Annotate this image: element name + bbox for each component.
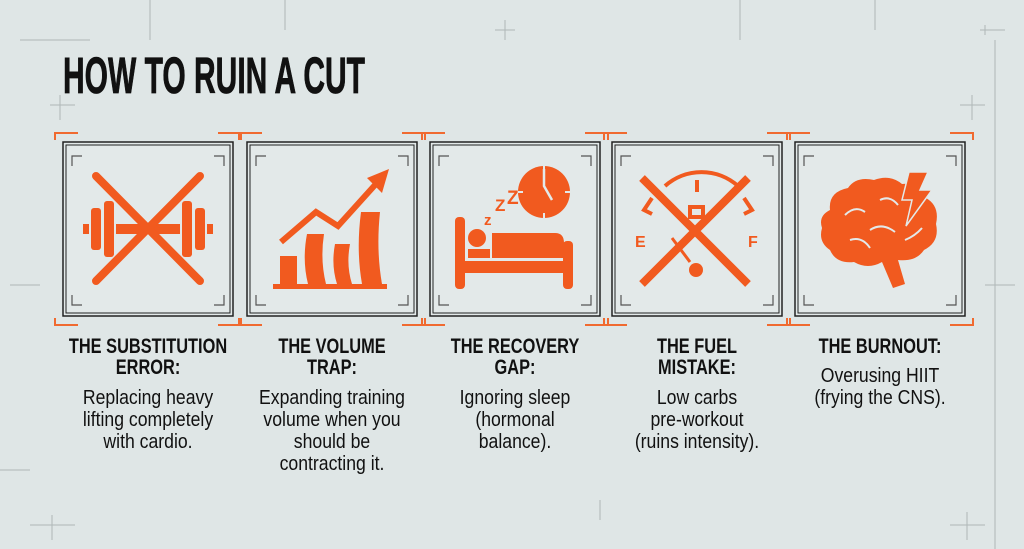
title: HOW TO RUIN A CUT bbox=[63, 47, 365, 104]
text: volume trap: THE VOLUME bbox=[278, 334, 386, 357]
text: volume trap: volume when you bbox=[263, 408, 401, 430]
icon: bed with clock bbox=[455, 166, 573, 289]
panel: substitution error bbox=[55, 133, 241, 325]
text: fuel mistake: MISTAKE: bbox=[658, 355, 736, 378]
panel: fuel mistake bbox=[604, 133, 790, 325]
panel: recovery gap bbox=[422, 133, 608, 325]
panel: volume trap bbox=[239, 133, 425, 325]
text: substitution error: ERROR: bbox=[116, 355, 180, 378]
text: volume trap: Expanding training bbox=[259, 386, 405, 408]
text: recovery gap: balance). bbox=[479, 430, 551, 452]
text: recovery gap: Ignoring sleep bbox=[460, 386, 570, 408]
icon: crossed fuel gauge bbox=[642, 172, 752, 284]
text: volume trap: should be bbox=[294, 430, 370, 452]
panel: burnout bbox=[787, 133, 973, 325]
icon: bed with clock: z bbox=[484, 212, 492, 229]
text: burnout bbox=[814, 334, 946, 408]
text: fuel mistake: pre-workout bbox=[650, 408, 744, 430]
text: volume trap: contracting it. bbox=[280, 452, 384, 474]
text: burnout: (frying the CNS). bbox=[814, 386, 946, 408]
text: fuel mistake: Low carbs bbox=[657, 386, 737, 408]
text: burnout: THE BURNOUT: bbox=[819, 334, 941, 357]
panel: fuel mistake: F bbox=[748, 234, 758, 251]
text: recovery gap: GAP: bbox=[495, 355, 535, 378]
text: fuel mistake: THE FUEL bbox=[657, 334, 737, 357]
icon: bed with clock: Z bbox=[495, 196, 505, 215]
panel: fuel mistake: E bbox=[635, 234, 646, 251]
text: recovery gap: THE RECOVERY bbox=[451, 334, 580, 357]
text: substitution error bbox=[69, 334, 227, 452]
icon: bed with clock: Z bbox=[507, 188, 519, 209]
text: substitution error: with cardio. bbox=[103, 430, 193, 452]
text: fuel mistake bbox=[635, 334, 759, 452]
text: substitution error: lifting completely bbox=[83, 408, 214, 430]
text: burnout: Overusing HIIT bbox=[821, 364, 940, 386]
icon: rising chart bbox=[273, 169, 389, 289]
text: recovery gap: (hormonal bbox=[475, 408, 555, 430]
icon: brain with lightning bbox=[821, 172, 937, 288]
text: recovery gap bbox=[451, 334, 580, 452]
text: substitution error: THE SUBSTITUTION bbox=[69, 334, 227, 357]
text: volume trap: TRAP: bbox=[307, 355, 357, 378]
text: volume trap bbox=[259, 334, 405, 474]
icon: crossed dumbbell bbox=[83, 176, 213, 281]
text: substitution error: Replacing heavy bbox=[83, 386, 214, 408]
text: fuel mistake: (ruins intensity). bbox=[635, 430, 759, 452]
